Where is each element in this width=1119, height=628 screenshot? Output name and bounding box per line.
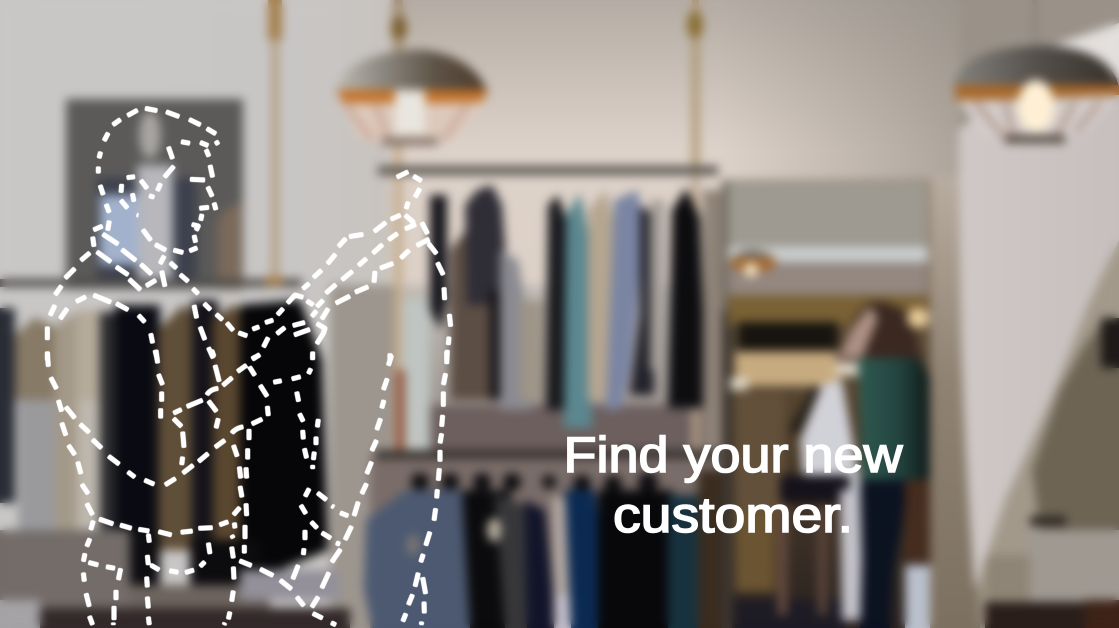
column and right wall — [930, 23, 1119, 628]
center upper clothes — [430, 185, 723, 450]
pendant lamp right — [953, 0, 1119, 143]
dashed outline of man holding a tablet — [47, 108, 451, 625]
person in mirror — [778, 302, 941, 628]
left rack of clothes — [0, 300, 328, 600]
floor left — [0, 530, 350, 628]
headline text — [564, 427, 903, 543]
poster on the wall — [66, 99, 243, 290]
left hanging rope and rail — [0, 0, 302, 287]
headline line 1: Find your new — [564, 427, 903, 483]
head, shoulders and arm outline — [47, 108, 451, 360]
center lower clothes — [364, 470, 728, 628]
center lower rail — [375, 450, 720, 459]
torso, tablet and legs outline — [47, 350, 447, 625]
headline line 2: customer. — [613, 487, 853, 543]
mirror — [722, 180, 930, 628]
pendant lamp left — [336, 0, 488, 145]
center upper clothes rail and ropes — [378, 0, 718, 455]
coat on right — [985, 318, 1119, 628]
